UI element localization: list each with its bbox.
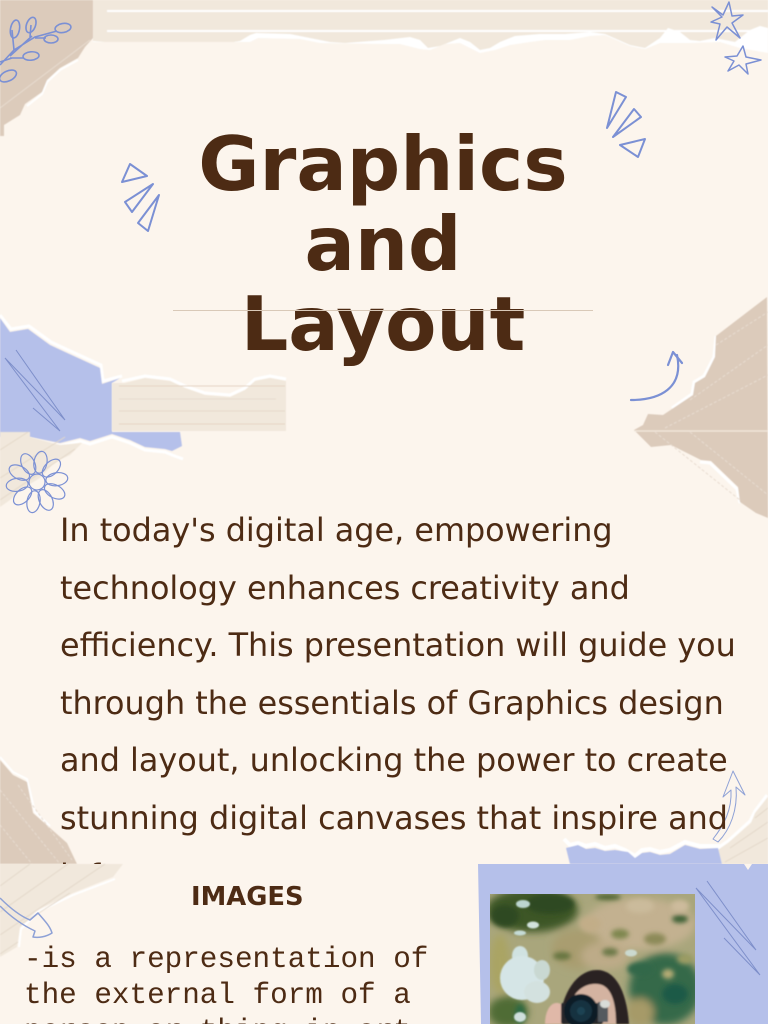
blue torn paper left — [0, 315, 183, 459]
icon: curved arrow — [631, 352, 682, 400]
icon: outlined arrow up right — [713, 771, 745, 842]
title rule — [173, 310, 593, 311]
icon: small star — [725, 46, 761, 74]
title — [198, 121, 568, 368]
images definition: -is a representation of — [24, 943, 428, 976]
icon: outlined arrow bottom left — [0, 898, 52, 937]
images heading: IMAGES — [191, 882, 304, 912]
title: Graphics and — [198, 121, 568, 288]
lined beige note paper — [112, 376, 286, 431]
icon: large star — [711, 2, 743, 40]
tan torn paper lower left — [0, 757, 77, 864]
blue photo panel — [478, 864, 768, 1024]
blue scribble lines — [5, 350, 65, 431]
blue scribble lines on panel — [696, 881, 760, 975]
tan torn paper right — [634, 297, 768, 518]
blue torn paper lower right top — [564, 839, 722, 864]
top lined paper strip — [93, 0, 768, 80]
title: Layout — [241, 281, 525, 368]
images definition: the external form of a — [24, 979, 411, 1012]
icon: burst triangles left — [122, 164, 159, 231]
icon: flower — [1, 446, 73, 518]
beige lined paper, left of second section — [0, 432, 82, 507]
icon: burst triangles right — [607, 92, 645, 157]
images definition — [24, 943, 428, 1024]
hair and face — [560, 970, 629, 1024]
icon: leaf sprig — [0, 16, 72, 84]
beige lined paper lower left — [0, 864, 123, 957]
beige lined paper lower right — [716, 795, 768, 864]
photograph: woman with camera — [490, 894, 695, 1024]
top left tan paper corner — [0, 0, 93, 136]
